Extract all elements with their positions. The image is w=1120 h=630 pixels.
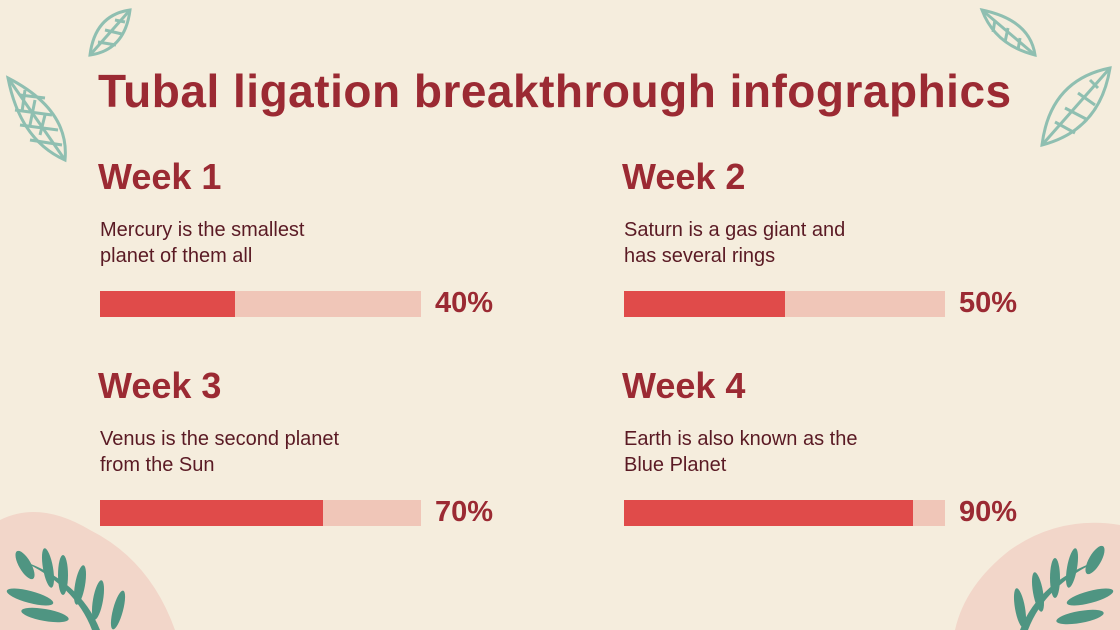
panel: week 3: Week 3 [98,365,221,406]
panel: week 3: 70% [435,496,493,528]
panel: week 2: Week 2 [622,156,745,197]
panel: week 3 [98,365,493,528]
panel: week 1: 40% [435,287,493,319]
panel: week 1: planet of them all [100,245,252,267]
panel: week 4: Blue Planet [624,454,726,476]
panel: week 1: Mercury is the smallest [100,219,304,241]
panel: week 4: Earth is also known as the [624,428,857,450]
panel: week 3: Venus is the second planet [100,428,339,450]
panel: week 2: Saturn is a gas giant and [624,219,845,241]
title: Tubal ligation breakthrough infographics [98,65,1012,117]
panel: week 2: 50% [959,287,1017,319]
panel: week 1: Week 1 [98,156,221,197]
panel: week 4: Week 4 [622,365,745,406]
panel: week 2 [622,156,1017,319]
panel: week 1 [98,156,493,319]
panel: week 4: 90% [959,496,1017,528]
panel: week 2: has several rings [624,245,775,267]
panel: week 3: from the Sun [100,454,215,476]
panel: week 4 [622,365,1017,528]
